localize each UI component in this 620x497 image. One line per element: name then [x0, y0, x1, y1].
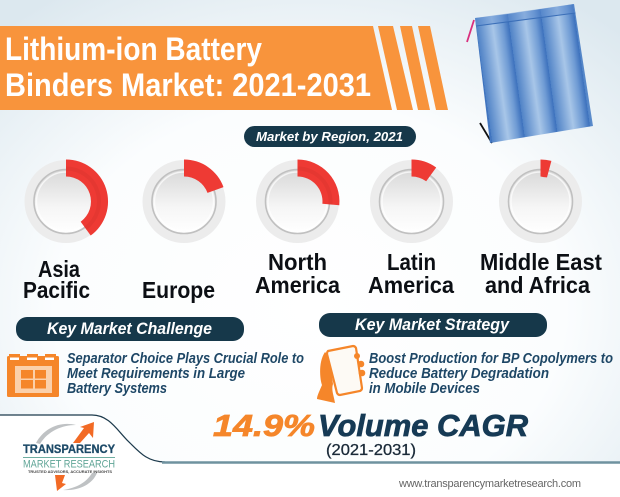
label: Latin America: Latin	[387, 249, 436, 275]
text: market challenge	[67, 351, 304, 397]
text: market strategy: Reduce Battery Degradation	[369, 366, 549, 382]
label: Latin America: America	[368, 272, 454, 298]
text: market challenge: Separator Choice Plays Crucial Role to	[67, 351, 304, 367]
text: market strategy	[369, 351, 613, 397]
label: Europe: Europe	[142, 277, 215, 303]
label: Middle East and Africa: and Africa	[485, 272, 590, 298]
text: market strategy: in Mobile Devices	[369, 381, 480, 397]
pill: key market strategy: Key Market Strategy	[355, 315, 510, 334]
icon: battery pack illustration	[467, 4, 593, 143]
label: North America: North	[268, 249, 327, 275]
label: Asia Pacific: Asia	[38, 256, 80, 282]
icon: battery	[7, 354, 59, 397]
title banner	[0, 26, 448, 110]
donut: Middle East and Africa	[499, 159, 582, 243]
stat: 14.9% volume CAGR: Volume CAGR	[318, 408, 529, 443]
text: market challenge: Battery Systems	[67, 381, 167, 397]
donut: Latin America	[370, 159, 453, 243]
label: North America: America	[255, 272, 340, 298]
label: Middle East and Africa: Middle East	[480, 249, 602, 275]
title text: Lithium-ion Battery	[5, 31, 262, 67]
title text	[5, 31, 371, 103]
title text: Binders Market: 2021-2031	[5, 67, 371, 103]
label: Latin America	[368, 249, 454, 298]
website url: www.transparencymarketresearch.com	[398, 478, 581, 490]
pill: market by region heading: Market by Region, 2021	[256, 129, 403, 144]
pill: key market challenge	[16, 317, 244, 341]
stat: 14.9% volume CAGR: 14.9%	[213, 408, 315, 443]
logo: Transparency Market Research: MARKET RESEARCH	[23, 458, 115, 470]
logo: Transparency Market Research: TRUSTED ADVISORS, ACCURATE INSIGHTS	[28, 470, 113, 474]
stat: 14.9% volume CAGR	[213, 408, 529, 459]
text: market challenge: Meet Requirements in Large	[67, 366, 245, 382]
label: Asia Pacific	[23, 256, 90, 303]
donut: Asia Pacific	[24, 159, 108, 243]
donut: Europe	[142, 159, 226, 243]
donut: North America	[256, 160, 339, 243]
pill: key market challenge: Key Market Challenge	[47, 319, 212, 338]
bottom white area with curved divider	[0, 415, 620, 497]
label: Middle East and Africa	[480, 249, 602, 298]
label: North America	[255, 249, 340, 298]
pill: key market strategy	[319, 313, 547, 337]
icon: hand holding phone	[317, 346, 365, 403]
logo: Transparency Market Research	[23, 422, 115, 491]
label: Asia Pacific: Pacific	[23, 277, 90, 303]
pill: market by region heading	[244, 126, 416, 147]
stat: 14.9% volume CAGR: (2021-2031)	[326, 442, 416, 459]
logo: Transparency Market Research: TRANSPARENCY	[23, 442, 115, 456]
